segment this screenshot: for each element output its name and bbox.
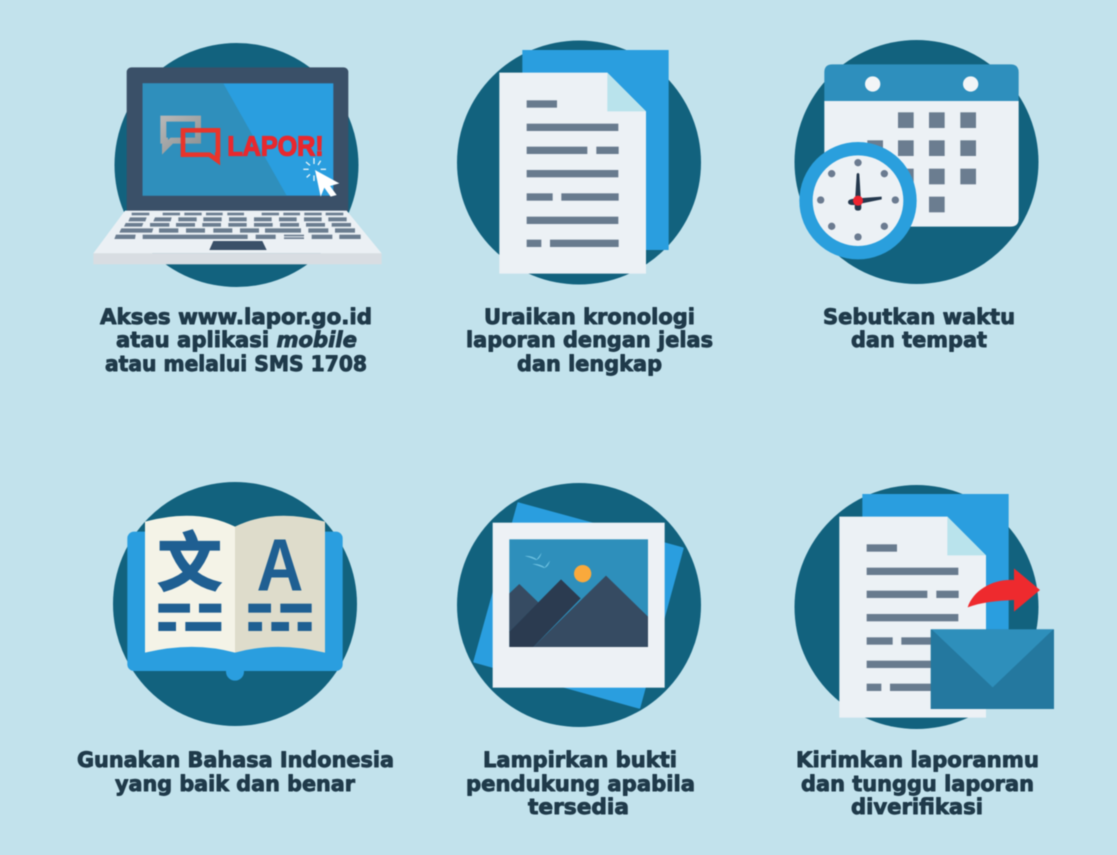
icon: circle backdrop 2 xyxy=(457,40,701,284)
icon: photo xyxy=(474,503,683,708)
icon: circle backdrop 6 xyxy=(794,485,1038,729)
panel: step 3 calendar xyxy=(794,40,1038,352)
text: step 1 caption: atau aplikasi mobile xyxy=(116,328,357,352)
icon: open book xyxy=(127,513,343,681)
text: step 3 caption: dan tempat xyxy=(851,328,987,352)
icon: red arrow xyxy=(968,568,1040,612)
text: step 3 caption: Sebutkan waktu xyxy=(823,305,1015,329)
text: step 2 caption xyxy=(466,305,713,376)
icon: LAPOR logo xyxy=(163,119,324,162)
text: step 5 caption: pendukung apabila xyxy=(466,772,695,796)
icon: document and envelope xyxy=(839,494,1054,718)
text: step 4 caption xyxy=(77,748,394,796)
text: step 6 caption: Kirimkan laporanmu xyxy=(796,748,1039,772)
text: step 6 caption: dan tunggu laporan xyxy=(801,772,1034,796)
text: step 6 caption: diverifikasi xyxy=(851,795,983,819)
text: step 4 caption: yang baik dan benar xyxy=(115,772,356,796)
text: step 3 caption xyxy=(823,305,1015,352)
text: step 5 caption: tersedia xyxy=(528,795,629,819)
icon: chinese character: 文 xyxy=(158,513,221,604)
text: step 4 caption: Gunakan Bahasa Indonesia xyxy=(77,748,394,772)
text: step 1 caption: atau melalui SMS 1708 xyxy=(105,352,367,376)
text: step 6 caption xyxy=(796,748,1039,819)
icon: circle backdrop 5 xyxy=(457,483,701,727)
panel: step 1 laptop xyxy=(93,43,382,376)
text: step 1 caption xyxy=(100,305,372,376)
icon: circle backdrop 4 xyxy=(113,482,357,726)
text: step 5 caption: Lampirkan bukti xyxy=(483,748,677,772)
panel: step 6 send xyxy=(794,485,1054,819)
panel: step 5 photo xyxy=(457,483,701,819)
text: step 2 caption: laporan dengan jelas xyxy=(466,328,713,352)
text: step 2 caption: Uraikan kronologi xyxy=(484,305,695,329)
text: step 5 caption xyxy=(466,748,695,819)
icon: cursor xyxy=(303,158,339,197)
icon: laptop xyxy=(93,67,382,264)
panel: step 4 book xyxy=(77,482,394,796)
panel: step 2 document xyxy=(457,40,713,376)
icon: circle backdrop 3 xyxy=(794,40,1038,284)
icon: document xyxy=(499,50,669,274)
text: step 2 caption: dan lengkap xyxy=(517,352,662,376)
icon: latin letter: A xyxy=(257,523,303,607)
icon: envelope xyxy=(931,629,1054,709)
icon: calendar xyxy=(799,64,1019,259)
icon: clock xyxy=(799,142,917,259)
text: step 1 caption: Akses www.lapor.go.id xyxy=(100,305,372,329)
icon: LAPOR logo: LAPOR! xyxy=(227,131,324,162)
icon: circle backdrop 1 xyxy=(114,43,358,287)
